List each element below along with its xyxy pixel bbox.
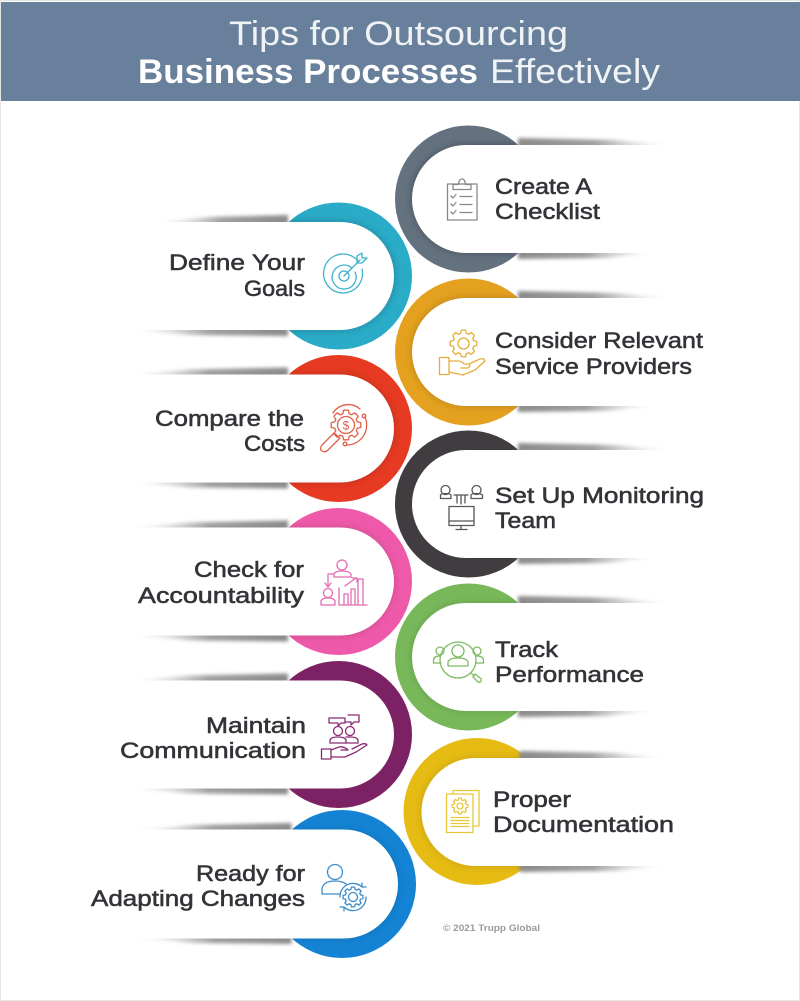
icon: magnifier with people [434, 642, 484, 682]
panel: compare the costs [148, 355, 412, 502]
panel: ready for adapting changes [91, 810, 416, 958]
label: Accountability [138, 583, 305, 608]
ring: red [148, 355, 412, 502]
icon: magnifier with gear and dollar [320, 405, 367, 452]
copyright note: © 2021 Trupp Global [443, 923, 540, 934]
icon: person with gear [322, 864, 366, 911]
label [138, 557, 305, 608]
panel: check for accountability [138, 508, 412, 655]
label [155, 406, 305, 456]
label: Team [495, 508, 556, 533]
icon: hand with people and speech bubbles [322, 715, 367, 759]
label: Create A [495, 174, 592, 199]
icon: documents with gear [446, 790, 479, 832]
panel: consider relevant service providers [395, 278, 706, 426]
ring: purple [100, 661, 412, 808]
icon: people and bar chart [321, 560, 367, 605]
ring: teal [148, 202, 412, 350]
label: Goals [244, 276, 305, 301]
title: Business Processes [138, 53, 478, 91]
label: Checklist [495, 199, 601, 224]
icon: target [324, 253, 367, 293]
title [138, 15, 660, 91]
panel: create a checklist [395, 126, 654, 272]
label: Adapting Changes [91, 886, 305, 911]
ring: yellow [404, 738, 649, 885]
panel: set up monitoring team [395, 430, 706, 578]
icon: magnifier with gear and dollar: $ [343, 418, 350, 432]
panel: track performance [395, 584, 654, 730]
ring: charcoal [395, 430, 706, 578]
label: Track [495, 637, 559, 662]
icon: team and monitor [440, 486, 482, 530]
label: Maintain [206, 713, 306, 738]
label [495, 174, 601, 224]
ring: green [395, 584, 654, 730]
panel: define your goals [148, 202, 412, 350]
label: Define Your [169, 250, 306, 275]
label: Service Providers [495, 354, 692, 379]
label: Proper [493, 787, 572, 812]
label: Consider Relevant [495, 328, 704, 353]
label: Communication [120, 738, 306, 763]
ring: blue [153, 810, 416, 958]
label: Set Up Monitoring [495, 483, 704, 508]
label [495, 637, 644, 687]
title: Tips for Outsourcing [229, 15, 568, 53]
label [120, 713, 306, 763]
icon: hand with gear [440, 330, 485, 375]
ring: pink [148, 508, 412, 655]
panel: proper documentation [404, 738, 673, 885]
header band [1, 2, 800, 101]
title: Effectively [490, 53, 660, 91]
label: Ready for [196, 861, 306, 886]
label: Check for [194, 557, 305, 582]
ring: slate [395, 126, 654, 272]
label: Performance [495, 662, 644, 687]
label: Documentation [493, 812, 674, 837]
label [91, 861, 306, 911]
panel: maintain communication [100, 661, 412, 808]
label [493, 787, 674, 837]
ring: amber [395, 278, 654, 426]
label [495, 483, 704, 533]
label [169, 250, 306, 301]
icon: clipboard [448, 179, 477, 220]
label: Compare the [155, 406, 304, 431]
label: Costs [244, 431, 305, 456]
label [495, 328, 704, 379]
